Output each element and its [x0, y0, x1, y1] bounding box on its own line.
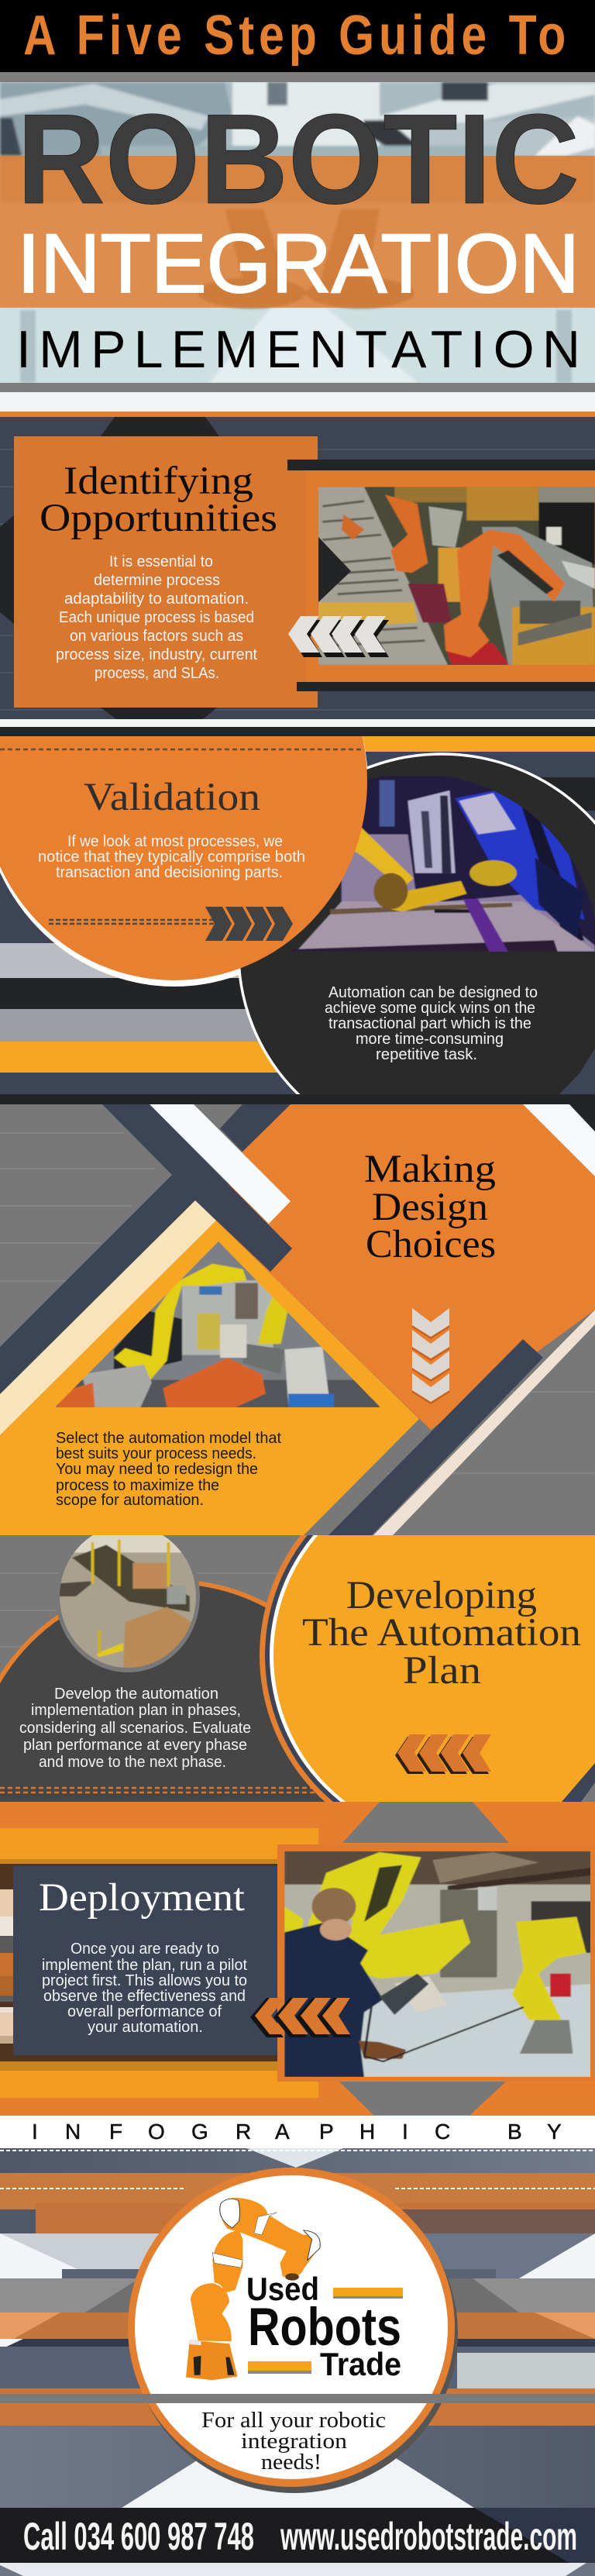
text block: automation wins	[325, 984, 538, 1063]
heading: developing the automation plan: Developing	[346, 1574, 537, 1617]
photo: yellow robot under blue light	[292, 777, 595, 952]
body text: transaction and decisioning parts.	[56, 864, 283, 881]
panel: making design choices	[0, 1104, 595, 1535]
body text: You may need to redesign the	[56, 1461, 258, 1478]
heading: developing the automation plan: The Automation	[302, 1611, 581, 1655]
tagline: needs!	[261, 2450, 322, 2474]
icon: left chevrons	[250, 1998, 351, 2037]
body text: and move to the next phase.	[39, 1754, 226, 1771]
heading: a five step guide to: A Five Step Guide To	[23, 3, 566, 66]
heading	[40, 460, 277, 540]
heading: Identifying	[64, 460, 253, 503]
orange circle white rim	[0, 736, 367, 987]
icon: robot arm logo	[186, 2198, 320, 2380]
text block: automation wins: Automation can be designed to	[328, 984, 538, 1001]
body text: If we look at most processes, we	[67, 833, 283, 850]
tagline: For all your robotic	[201, 2408, 386, 2433]
text block: automation wins: transactional part which is the	[328, 1015, 531, 1032]
text block: automation wins: repetitive task.	[376, 1046, 477, 1063]
heading: developing the automation plan	[303, 1581, 581, 1683]
body text: notice that they typically comprise both	[38, 849, 305, 866]
divider bar	[0, 1094, 595, 1104]
gray trapezoids	[342, 1802, 509, 1843]
background stripes	[0, 736, 595, 1073]
logo wordmark	[246, 2271, 401, 2382]
footer panel	[0, 2148, 595, 2576]
photo: technician with yellow robot	[284, 1851, 592, 2077]
panel: validation	[0, 736, 595, 1094]
icon: left chevrons	[288, 616, 389, 657]
body text: implement the plan, run a pilot	[42, 1957, 247, 1974]
dark circle with orange ring	[0, 1581, 325, 1802]
body text: plan performance at every phase	[23, 1737, 247, 1754]
banner: infographic by	[0, 2116, 595, 2148]
logo wordmark: Robots	[248, 2297, 401, 2357]
logo wordmark: Used	[246, 2271, 319, 2307]
dashed connector	[49, 920, 217, 924]
panel: deployment	[0, 1802, 595, 2116]
banner: infographic by: INFOGRAPHIC BY	[32, 2120, 562, 2144]
body text: your automation.	[88, 2019, 203, 2036]
body text: It is essential to	[109, 553, 213, 570]
body text: best suits your process needs.	[56, 1445, 256, 1462]
heading: making design choices: Choices	[366, 1223, 496, 1266]
body text: process to maximize the	[56, 1477, 219, 1494]
body text	[56, 553, 257, 682]
oval photo: boxes on conveyor	[57, 1535, 200, 1672]
header factory photo	[0, 82, 595, 383]
dark circle	[239, 752, 595, 1094]
body text: process, and SLAs.	[95, 665, 219, 682]
body text: Select the automation model that	[56, 1430, 281, 1447]
body text: considering all scenarios. Evaluate	[19, 1720, 251, 1737]
yellow triangle	[0, 1221, 419, 1535]
gray strip	[0, 2394, 595, 2403]
photo: yellow robots with engines	[53, 1242, 383, 1407]
body text: process size, industry, current	[56, 646, 257, 663]
body text: overall performance of	[67, 2003, 222, 2020]
body text: Develop the automation	[54, 1686, 218, 1703]
photo frame bars	[287, 460, 595, 691]
contact bar	[0, 2508, 595, 2563]
white diagonal band	[150, 1104, 291, 1224]
heading: integration: INTEGRATION	[17, 216, 580, 310]
body text: Once you are ready to	[71, 1941, 219, 1958]
heading: developing the automation plan: Plan	[403, 1649, 481, 1693]
icon: right chevrons	[205, 907, 293, 941]
orange diamond	[216, 1104, 595, 1430]
icon: left chevrons	[395, 1734, 491, 1774]
orange text card	[14, 436, 318, 708]
body text	[56, 1430, 281, 1509]
header banner	[0, 0, 595, 417]
heading: making design choices: Design	[372, 1186, 488, 1229]
heading: robotic: ROBOTIC	[17, 88, 580, 230]
dark arrow marker	[318, 537, 351, 602]
icon: down chevrons	[412, 1308, 449, 1404]
body text: determine process	[94, 572, 220, 589]
body text	[19, 1686, 251, 1771]
cream diagonal bands	[0, 1200, 216, 1435]
striped background	[0, 2148, 595, 2576]
logo badge	[128, 2168, 458, 2493]
body text: Each unique process is based	[59, 609, 254, 626]
body text: adaptability to automation.	[64, 591, 249, 608]
photo: orange palletising robots	[318, 487, 595, 665]
yellow circle with rings	[260, 1535, 595, 1802]
heading: Opportunities	[40, 497, 277, 540]
heading: making design choices	[364, 1148, 496, 1266]
body text: implementation plan in phases,	[31, 1702, 241, 1719]
navy text card	[13, 1866, 279, 2055]
body text	[42, 1941, 247, 2036]
logo bars	[248, 2288, 403, 2374]
photo frame	[277, 1844, 595, 2082]
divider bands	[0, 719, 595, 736]
heading: validation: Validation	[84, 776, 260, 819]
orange circle	[0, 736, 367, 980]
text block: automation wins: more time-consuming	[356, 1031, 504, 1048]
body text	[38, 833, 305, 881]
body text: project first. This allows you to	[42, 1972, 247, 1989]
tagline: integration	[241, 2429, 348, 2454]
body text: observe the effectiveness and	[43, 1988, 246, 2005]
heading: deployment: Deployment	[39, 1876, 245, 1920]
heading: implementation: IMPLEMENTATION	[16, 320, 580, 379]
heading: making design choices: Making	[364, 1148, 496, 1191]
tagline	[201, 2408, 386, 2474]
dashed lines	[0, 2151, 595, 2189]
body text: scope for automation.	[56, 1492, 204, 1509]
text block: automation wins: achieve some quick wins on the	[325, 1000, 535, 1017]
logo wordmark: Trade	[320, 2346, 401, 2382]
navy diagonal bands	[0, 1104, 543, 1535]
body text: on various factors such as	[70, 628, 243, 645]
side stripes	[0, 1867, 13, 2055]
panel: developing the automation plan	[0, 1535, 595, 1802]
panel: identifying opportunities	[0, 417, 595, 719]
phone number: Call 034 600 987 748	[23, 2515, 254, 2558]
